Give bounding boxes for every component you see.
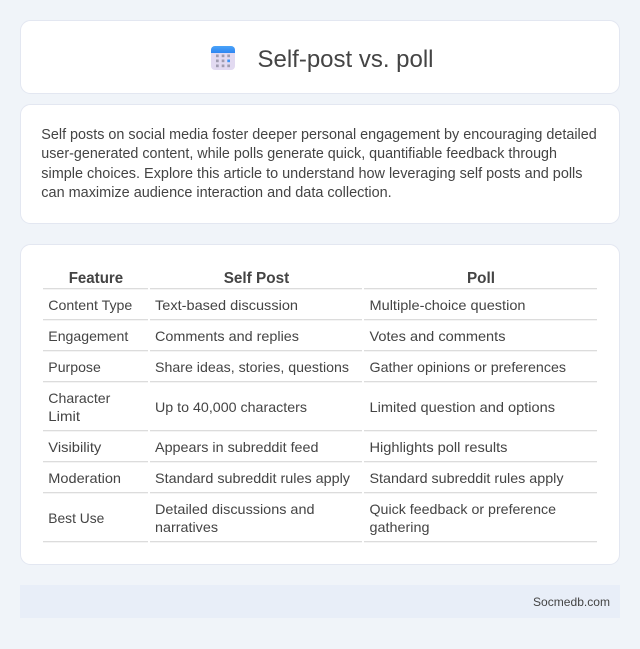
text block: description: simple choices. Explore this article to understand how leveraging self posts and polls [41,166,583,182]
row: purpose: Gather opinions or preferences [370,359,566,375]
title: Self-post vs. poll [258,46,434,73]
table header row: Feature [69,270,124,287]
row: best use [48,501,556,535]
row: best use: Best Use [48,510,104,526]
row: engagement: Votes and comments [370,328,506,344]
text block: description: user-generated content, while polls generate quick, quantifiable feedback through [41,146,557,162]
panel: comparison table [20,244,620,564]
panel: title card [20,20,620,94]
row: best use: gathering [370,519,430,535]
row: engagement: Comments and replies [155,328,299,344]
row: character limit: Character [48,390,111,406]
row: visibility: Visibility [48,439,101,455]
row: character limit: Up to 40,000 characters [155,399,307,415]
row: moderation: Moderation [48,470,121,486]
row: character limit [48,390,555,424]
row: best use: narratives [155,519,218,535]
icon: calendar [211,46,235,70]
row: engagement [48,328,506,344]
row: character limit: Limited question and options [370,399,555,415]
table header row: Poll [467,270,495,287]
footer credit: Socmedb.com [533,595,610,609]
row: content type: Text-based discussion [155,297,298,313]
footer bar [20,585,620,618]
row: content type: Multiple-choice question [370,297,526,313]
row: visibility: Appears in subreddit feed [155,439,318,455]
row: best use: Quick feedback or preference [370,501,556,517]
row: best use: Detailed discussions and [155,501,314,517]
row: moderation [48,470,564,486]
text block: description [41,127,597,201]
row: visibility [48,439,508,455]
row: moderation: Standard subreddit rules apply [370,470,564,486]
table header row [69,270,495,287]
row: content type: Content Type [48,297,133,313]
row: engagement: Engagement [48,328,128,344]
row: purpose: Share ideas, stories, questions [155,359,349,375]
row: character limit: Limit [48,408,80,424]
row: purpose: Purpose [48,359,101,375]
panel: description card [20,104,620,224]
row: moderation: Standard subreddit rules apply [155,470,350,486]
row: purpose [48,359,566,375]
text block: description: Self posts on social media foster deeper personal engagement by encouraging detailed [41,127,597,143]
row: visibility: Highlights poll results [370,439,508,455]
row: content type [48,297,526,313]
table header row: Self Post [224,270,289,287]
text block: description: can maximize audience interaction and data collection. [41,185,392,201]
